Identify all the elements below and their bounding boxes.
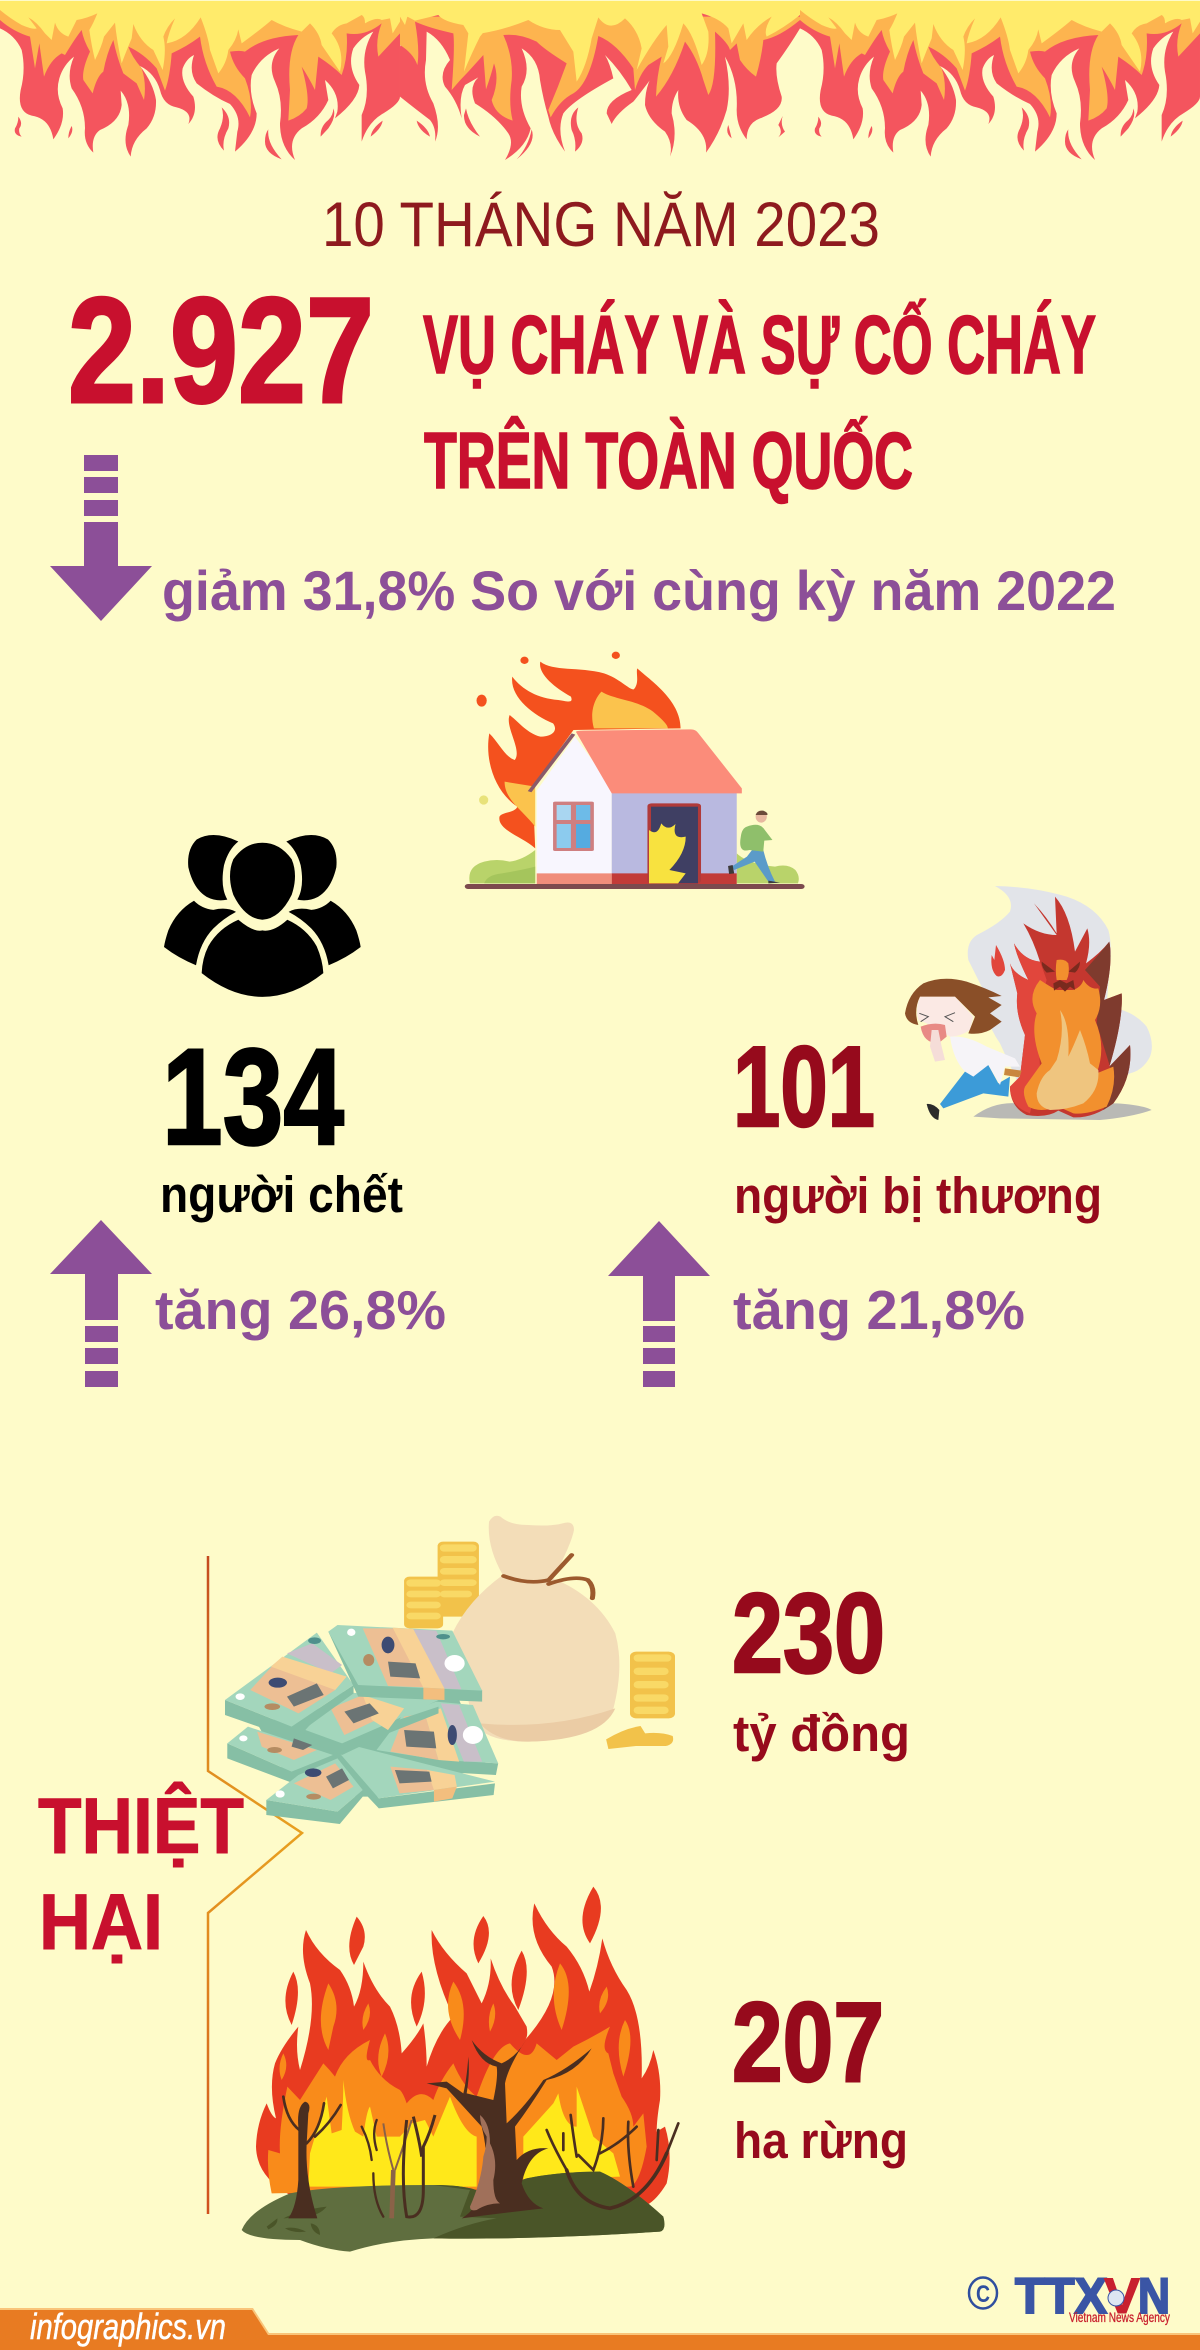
cash brick: lower right bbox=[374, 1702, 498, 1775]
heading: damage: HẠI bbox=[39, 1877, 163, 1966]
heading: damage: THIỆT bbox=[38, 1781, 244, 1870]
heading: damage bbox=[38, 1781, 244, 1966]
stat: injured number: 101 bbox=[733, 1024, 875, 1151]
stat: deaths label: người chết bbox=[160, 1166, 403, 1223]
text: deaths increase: tăng 26,8% bbox=[155, 1279, 446, 1341]
arrow: up, deaths increased bbox=[50, 1220, 152, 1387]
logo: TTXVN: TTX bbox=[1015, 2268, 1107, 2324]
illustration: forest fire bbox=[242, 1887, 678, 2252]
headline number: 2.927 bbox=[68, 266, 374, 434]
headline text bbox=[423, 298, 1096, 505]
text: injured increase: tăng 21,8% bbox=[733, 1279, 1025, 1341]
cash backing mass bbox=[257, 1697, 487, 1797]
cash brick: top left bbox=[225, 1633, 354, 1738]
footer band bbox=[0, 2306, 1200, 2350]
cash brick: bottom left bbox=[266, 1758, 363, 1824]
logo: TTXVN: V bbox=[1104, 2268, 1141, 2324]
logo: TTXVN bbox=[969, 2268, 1170, 2325]
date heading: 10 THÁNG NĂM 2023 bbox=[322, 190, 880, 260]
illustration: money bag and cash bbox=[225, 1516, 675, 1824]
logo: TTXVN: N bbox=[1138, 2268, 1170, 2324]
icon: group of people bbox=[164, 835, 361, 997]
stat: money lost number: 230 bbox=[732, 1570, 885, 1696]
stat: forest lost number: 207 bbox=[732, 1979, 884, 2105]
cash brick: centre bbox=[303, 1692, 439, 1755]
headline text: TRÊN TOÀN QUỐC bbox=[424, 416, 913, 505]
arrow: up, injured increased bbox=[608, 1221, 710, 1387]
arrow: down, fires decreased bbox=[50, 455, 152, 621]
decorative flame border bbox=[0, 1, 1200, 160]
logo: TTXVN: C bbox=[976, 2281, 990, 2308]
cash brick: bottom right bbox=[340, 1745, 495, 1808]
stat: deaths number: 134 bbox=[162, 1021, 344, 1174]
illustration: girl fleeing a fire monster bbox=[905, 886, 1152, 1120]
stat: injured label: người bị thương bbox=[734, 1167, 1102, 1224]
stat: forest lost label: ha rừng bbox=[734, 2112, 908, 2169]
text: decrease compared with 2022: giảm 31,8% So với cùng kỳ năm 2022 bbox=[162, 559, 1116, 622]
cash brick: top right bbox=[328, 1625, 482, 1702]
cash brick: middle left bbox=[227, 1727, 333, 1783]
illustration: burning house bbox=[465, 652, 805, 889]
stat: money lost label: tỷ đồng bbox=[733, 1705, 910, 1762]
bracket connecting damage items bbox=[208, 1556, 302, 2214]
footer band: infographics.vn bbox=[30, 2306, 226, 2347]
